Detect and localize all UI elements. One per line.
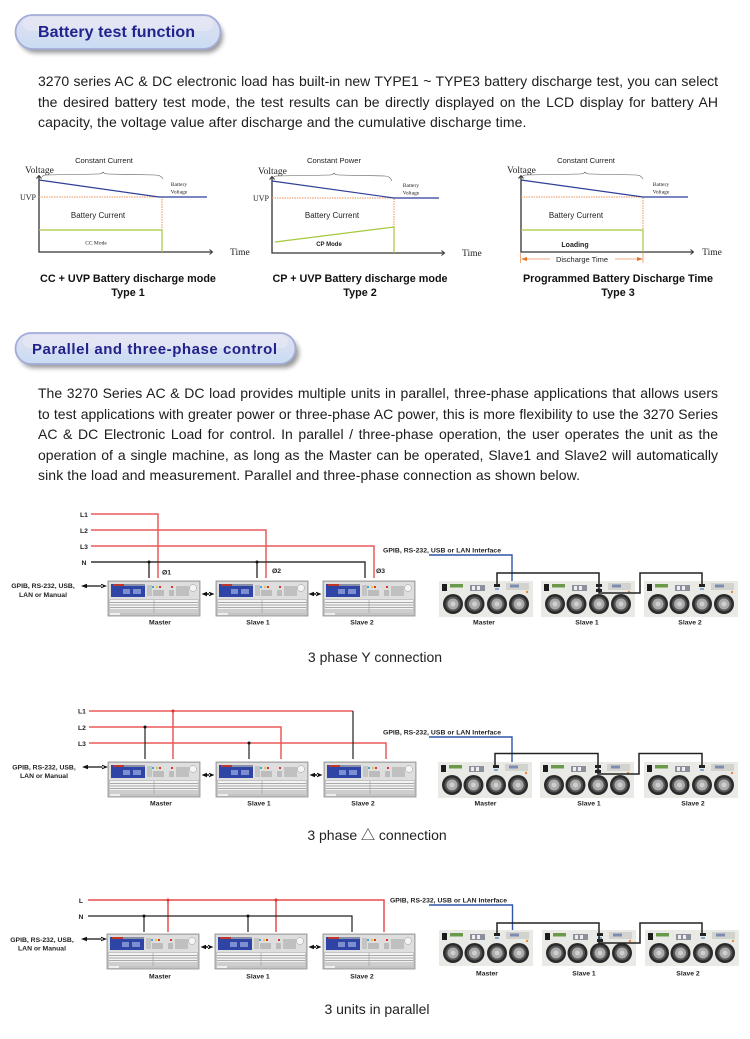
chart: CC + UVP discharge xyxy=(20,156,250,258)
text block: parallel and three-phase description xyxy=(38,385,718,483)
caption: type 1 xyxy=(40,273,216,299)
diagram: 3 phase delta front wiring: Slave 2 xyxy=(351,800,375,808)
diagram: 3 phase Y front wiring: GPIB, RS-232, USB, xyxy=(11,583,75,590)
diagram: 3 units parallel front wiring xyxy=(10,898,415,980)
chart: CP + UVP discharge: Time xyxy=(462,249,482,259)
chart: programmed discharge time: Loading xyxy=(561,242,589,249)
text block: parallel and three-phase description: operation of a single machine, as long as the Master can be operated, Slave1 and Slave2 will automatically xyxy=(38,447,718,463)
text block: parallel and three-phase description: sink the load and measurement. Parallel and three-phase connection as shown below. xyxy=(38,467,580,483)
text block: parallel and three-phase description: The 3270 Series AC & DC load provides multiple units in parallel, three-phase applications that allows users xyxy=(38,385,718,401)
diagram: 3 phase delta front wiring: L2 xyxy=(78,725,86,732)
heading: Battery test function xyxy=(16,15,223,53)
diagram: 3 phase delta front wiring: Master xyxy=(150,800,172,808)
diagram: 3 phase Y front wiring: L2 xyxy=(80,528,88,535)
chart: CC + UVP discharge: Voltage xyxy=(25,166,54,176)
chart: CC + UVP discharge: Voltage xyxy=(171,190,188,196)
text block: parallel and three-phase description: AC & DC Electronic Load for control. In parallel / three-phase operation, the user operates the unit as the xyxy=(38,426,718,442)
diagram: 3 phase delta front wiring: LAN or Manual xyxy=(20,773,68,780)
chart: CC + UVP discharge: Battery Current xyxy=(71,211,126,220)
caption: type 1: Type 1 xyxy=(111,287,145,299)
chart: programmed discharge time: Time xyxy=(702,248,722,258)
diagram: 3 phase Y rear wiring xyxy=(383,548,738,626)
chart: CC + UVP discharge: Battery xyxy=(171,182,187,188)
diagram: 3 phase delta rear wiring: Slave 2 xyxy=(681,800,705,808)
diagram: 3 units parallel rear wiring: Master xyxy=(476,970,498,978)
diagram: 3 phase Y front wiring: L1 xyxy=(80,512,88,519)
diagram: 3 units parallel rear wiring: Slave 2 xyxy=(676,970,700,978)
chart: CC + UVP discharge: Constant Current xyxy=(75,156,134,165)
chart: CP + UVP discharge: CP Mode xyxy=(316,242,342,248)
heading: Battery test function: Battery test function xyxy=(38,24,195,41)
diagram: 3 phase Y rear wiring: Master xyxy=(473,620,495,626)
caption: 3 units in parallel: 3 units in parallel xyxy=(324,1001,430,1017)
diagram: 3 phase Y front wiring: Slave 2 xyxy=(350,620,374,626)
diagram: 3 phase Y rear wiring: GPIB, RS-232, USB or LAN Interface xyxy=(383,548,501,554)
chart: programmed discharge time: Discharge Time xyxy=(556,255,608,264)
text block: battery test intro: capacity, the voltage value after discharge and the cumulative discharge time. xyxy=(38,114,526,130)
chart: programmed discharge time: Voltage xyxy=(653,190,670,196)
diagram: 3 phase delta rear wiring: GPIB, RS-232, USB or LAN Interface xyxy=(383,730,501,736)
diagram: 3 units parallel front wiring: LAN or Manual xyxy=(18,946,66,952)
diagram: 3 phase delta rear wiring: Master xyxy=(475,800,497,808)
chart: CP + UVP discharge: Constant Power xyxy=(307,156,361,165)
chart: CC + UVP discharge: UVP xyxy=(20,193,37,202)
diagram: 3 phase delta front wiring: L1 xyxy=(78,708,86,716)
diagram: 3 units parallel front wiring: GPIB, RS-232, USB, xyxy=(10,937,74,944)
caption: 3 phase Y connection: 3 phase Y connection xyxy=(308,649,442,665)
caption: type 3: Type 3 xyxy=(601,287,635,299)
diagram: 3 units parallel front wiring: Slave 1 xyxy=(246,974,270,980)
diagram: 3 phase delta front wiring xyxy=(12,708,416,808)
diagram: 3 phase Y front wiring: Slave 1 xyxy=(246,620,270,626)
diagram: 3 phase Y front wiring: L3 xyxy=(80,544,88,551)
diagram: 3 phase Y front wiring: LAN or Manual xyxy=(19,592,67,599)
diagram: 3 phase Y front wiring xyxy=(11,512,415,626)
diagram: 3 phase Y front wiring: Ø1 xyxy=(162,570,171,576)
diagram: 3 units parallel rear wiring xyxy=(390,898,739,978)
diagram: 3 units parallel rear wiring: Slave 1 xyxy=(572,970,596,978)
chart: programmed discharge time: Battery xyxy=(653,182,669,188)
chart: programmed discharge time: Constant Current xyxy=(557,156,616,165)
diagram: 3 phase Y front wiring: Ø2 xyxy=(272,568,281,575)
diagram: 3 units parallel front wiring: Slave 2 xyxy=(350,974,374,980)
diagram: 3 phase Y front wiring: N xyxy=(82,560,87,567)
chart: CP + UVP discharge: Voltage xyxy=(258,167,287,177)
caption: 3 phase delta connection: 3 phase △ connection xyxy=(307,827,447,843)
caption: type 2: CP + UVP Battery discharge mode xyxy=(272,273,448,285)
chart: CC + UVP discharge: CC Mode xyxy=(85,240,107,246)
text block: parallel and three-phase description: to test applications with greater power or three-phase AC power, this is more flexibility to use the 3270 Series xyxy=(38,406,718,422)
text block: battery test intro xyxy=(38,73,718,130)
caption: type 3 xyxy=(523,273,713,299)
diagram: 3 phase Y rear wiring: Slave 2 xyxy=(678,620,702,626)
caption: type 2 xyxy=(272,273,448,299)
diagram: 3 phase delta rear wiring: Slave 1 xyxy=(577,800,601,808)
caption: type 2: Type 2 xyxy=(343,287,377,299)
diagram: 3 units parallel front wiring: L xyxy=(79,898,83,905)
diagram: 3 phase Y front wiring: Master xyxy=(149,620,171,626)
heading: Parallel and three-phase control: Parallel and three-phase control xyxy=(32,341,277,358)
chart: CP + UVP discharge xyxy=(253,156,482,259)
chart: CP + UVP discharge: Battery Current xyxy=(305,211,360,220)
text block: battery test intro: the desired battery test mode, the test results can be directly displayed on the LCD display for battery AH xyxy=(38,94,718,110)
chart: CC + UVP discharge: Time xyxy=(230,248,250,258)
diagram: 3 phase delta front wiring: GPIB, RS-232, USB, xyxy=(12,764,76,772)
heading: Parallel and three-phase control xyxy=(16,333,299,368)
diagram: 3 phase delta front wiring: Slave 1 xyxy=(247,800,271,808)
chart: CP + UVP discharge: Battery xyxy=(403,183,419,189)
chart: programmed discharge time: Voltage xyxy=(507,166,536,176)
diagram: 3 phase Y rear wiring: Slave 1 xyxy=(575,620,599,626)
diagram: 3 units parallel front wiring: N xyxy=(79,914,84,921)
diagram: 3 units parallel front wiring: Master xyxy=(149,974,171,980)
chart: CP + UVP discharge: Voltage xyxy=(403,190,420,196)
caption: type 1: CC + UVP Battery discharge mode xyxy=(40,273,216,285)
chart: programmed discharge time: Battery Current xyxy=(549,211,604,220)
diagram: 3 phase delta rear wiring xyxy=(383,730,738,808)
text block: battery test intro: 3270 series AC & DC electronic load has built-in new TYPE1 ~ TYPE3 battery discharge test, you can select xyxy=(38,73,718,89)
chart: programmed discharge time xyxy=(507,156,722,264)
caption: type 3: Programmed Battery Discharge Time xyxy=(523,273,713,285)
diagram: 3 phase Y front wiring: Ø3 xyxy=(376,568,385,575)
chart: CP + UVP discharge: UVP xyxy=(253,194,270,203)
diagram: 3 phase delta front wiring: L3 xyxy=(78,741,86,748)
diagram: 3 units parallel rear wiring: GPIB, RS-232, USB or LAN Interface xyxy=(390,898,507,904)
